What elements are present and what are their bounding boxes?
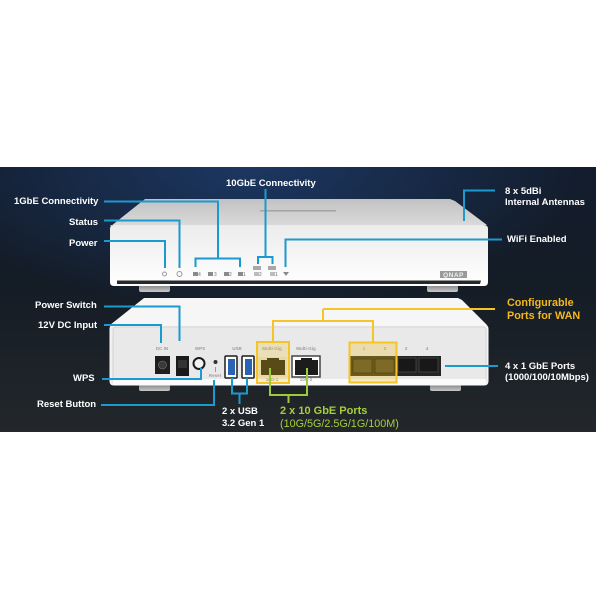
line: WiFi enabled — [286, 240, 502, 267]
bottom device: rear view router — [110, 298, 488, 391]
line: WPS — [102, 368, 201, 379]
label: Configurable Ports for WAN: Configurable — [507, 297, 574, 309]
line: 10GbE bracket — [258, 257, 272, 264]
QNAP badge: QNAP — [443, 272, 464, 279]
label: WPS: WPS — [73, 373, 95, 384]
top surface — [110, 298, 487, 325]
LED number labels: 2 — [229, 272, 232, 278]
1GbE port LED icons — [193, 266, 289, 276]
line: power — [104, 241, 165, 268]
device feet — [139, 284, 458, 292]
callout lines: yellow WAN — [273, 309, 495, 342]
callout lines: blue — [101, 189, 502, 405]
port labels: 10G-2 — [300, 377, 313, 382]
label: 10 GbE ports: (10G/5G/2.5G/1G/100M) — [280, 418, 399, 430]
port labels: Multi-Gig — [296, 346, 316, 351]
port labels: Multi-Gig — [262, 346, 282, 351]
label: USB — [222, 406, 265, 429]
port labels: Reset — [209, 373, 222, 378]
label: 10 GbE ports: 2 x 10 GbE Ports — [280, 405, 367, 417]
line: USB bracket — [232, 378, 247, 394]
label: 10 GbE ports — [280, 405, 399, 430]
port labels: 4 — [426, 346, 429, 351]
label: 4 x 1 GbE Ports — [505, 361, 589, 383]
label: Configurable Ports for WAN — [507, 297, 580, 322]
label: Power: Power — [69, 238, 98, 249]
label: Power Switch: Power Switch — [35, 300, 97, 311]
line: power switch — [104, 306, 180, 341]
label: antennas — [505, 186, 585, 208]
LED number labels: 4 — [198, 272, 201, 278]
label: 10GbE Connectivity: 10GbE Connectivity — [226, 178, 316, 189]
label: Reset Button: Reset Button — [37, 399, 96, 410]
10 GbE port 1 highlighted — [258, 357, 287, 377]
label: Configurable Ports for WAN: Ports for WAN — [507, 310, 580, 322]
front face — [110, 225, 488, 286]
top surface — [110, 199, 487, 226]
callout lines: green 10GbE — [270, 368, 307, 403]
label: Status: Status — [69, 217, 98, 228]
label: 1GbE Connectivity: 1GbE Connectivity — [14, 196, 99, 207]
model text strip — [260, 210, 336, 212]
line: reset — [101, 380, 214, 405]
port labels — [156, 346, 429, 382]
DC input port — [155, 356, 170, 374]
label: USB: 2 x USB — [222, 406, 258, 417]
line: 10GbE connectivity — [264, 189, 266, 257]
line: 1GbE bracket — [196, 258, 240, 267]
device feet — [139, 384, 461, 391]
1 GbE port block — [350, 356, 441, 376]
port 1 yellow outline — [257, 342, 289, 383]
port labels: 1 — [363, 346, 366, 351]
label: USB: 3.2 Gen 1 — [222, 418, 265, 429]
LED number labels — [198, 272, 278, 278]
port labels: 2 — [384, 346, 387, 351]
line: 4x1GbE — [445, 365, 498, 367]
label: antennas: 8 x 5dBi — [505, 186, 541, 197]
port labels: WPS — [195, 346, 205, 351]
port labels: USB — [232, 346, 242, 351]
label: 4 x 1 GbE Ports: 4 x 1 GbE Ports — [505, 361, 575, 372]
LED number labels: 1 — [243, 272, 246, 278]
power switch — [176, 356, 189, 376]
label: antennas: Internal Antennas — [505, 197, 585, 208]
label: WiFi Enabled: WiFi Enabled — [507, 234, 567, 245]
front dark slot — [117, 280, 481, 284]
line: status — [104, 220, 180, 268]
10 GbE port 2 — [292, 356, 320, 377]
LED number labels: 1 — [275, 272, 278, 278]
WPS button — [194, 358, 204, 369]
port labels: 3 — [405, 346, 408, 351]
USB ports — [225, 356, 254, 378]
front status icons — [162, 272, 182, 276]
port labels: DC IN — [156, 346, 168, 351]
top device: front view router — [110, 199, 488, 292]
line: USB stem — [238, 393, 240, 404]
line: antennas — [464, 190, 495, 221]
LED number labels: 2 — [259, 272, 262, 278]
label: 12V DC Input: 12V DC Input — [38, 320, 98, 331]
LED number labels: 3 — [214, 272, 217, 278]
dark background panel — [0, 167, 596, 432]
line: DC input — [104, 325, 161, 343]
label: 4 x 1 GbE Ports: (1000/100/10Mbps) — [505, 372, 589, 383]
rear face — [110, 325, 488, 385]
yellow tint over port 1 area — [257, 342, 289, 383]
QNAP badge — [440, 271, 467, 279]
reset pinhole — [214, 360, 218, 372]
yellow highlight over WAN ports 1 and 2 — [350, 342, 396, 382]
line: 1GbE connectivity — [104, 202, 218, 259]
port labels: 10G-1 — [266, 377, 279, 382]
